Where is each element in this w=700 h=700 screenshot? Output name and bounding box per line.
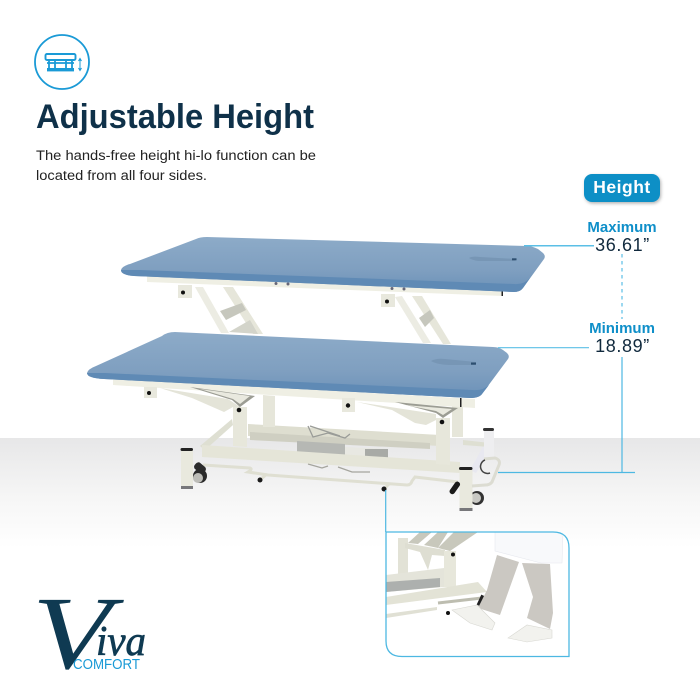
- table: lower top rail: [113, 378, 475, 425]
- lower table top cushion: [87, 332, 509, 398]
- right foot column: [459, 467, 472, 511]
- description text: [36, 148, 316, 184]
- height badge: Height: [593, 177, 651, 197]
- connector to inset: [385, 490, 387, 532]
- inset left leg: [478, 555, 519, 615]
- floor leader line: [498, 472, 635, 474]
- inset right leg: [522, 563, 553, 629]
- floor background: [0, 438, 700, 548]
- pedal rail: [203, 465, 458, 488]
- front beam: [202, 445, 460, 473]
- inset post: [398, 538, 408, 574]
- upper table top cushion: [121, 237, 545, 292]
- logo script iva: iva: [96, 619, 146, 665]
- table: scissor arms: [195, 287, 451, 344]
- inset table slats: [408, 532, 432, 544]
- logo script V: V: [32, 576, 125, 691]
- back wheels: [193, 469, 207, 483]
- solid height span: [621, 357, 623, 472]
- inset left shoe: [452, 605, 495, 630]
- description text: The hands-free height hi-lo function can be: [36, 148, 316, 164]
- icon: table with height arrow: [35, 35, 89, 89]
- table: base frame: [180, 395, 500, 511]
- inset rail: [386, 607, 437, 618]
- maximum leader line: [524, 245, 594, 247]
- bracket middle: [342, 398, 355, 412]
- maximum value: 36.61”: [595, 235, 650, 255]
- minimum leader line: [498, 347, 589, 349]
- left foot column: [180, 448, 193, 489]
- inset photo: foot pedal: [386, 532, 569, 657]
- bracket left: [144, 387, 157, 398]
- logo: [32, 576, 146, 691]
- logo subtitle: COMFORT: [73, 657, 140, 673]
- inset coat: [495, 532, 563, 563]
- bracket left: [178, 285, 192, 298]
- inset arm: [405, 543, 445, 570]
- bracket right: [381, 294, 395, 307]
- inset pedal: [438, 598, 482, 603]
- title: Adjustable Height: [36, 98, 314, 136]
- uprights: [233, 407, 247, 447]
- pedal knobs: [258, 478, 262, 482]
- inset right shoe: [508, 625, 552, 642]
- minimum label: Minimum: [589, 320, 655, 337]
- back right column: [472, 428, 500, 486]
- left arm: [160, 388, 240, 412]
- minimum value: 18.89”: [595, 336, 650, 356]
- back frame: [248, 424, 440, 446]
- right arm: [357, 402, 436, 425]
- description text: located from all four sides.: [36, 168, 207, 184]
- table: upper top rail: [147, 276, 503, 307]
- inset beam: [386, 582, 487, 605]
- height badge: [584, 174, 660, 202]
- inset frame: [386, 532, 569, 656]
- inset upright: [444, 551, 456, 587]
- inset mechanism: [386, 568, 444, 592]
- dashed height span: [621, 254, 623, 319]
- maximum label: Maximum: [587, 219, 657, 236]
- motor and cables: [297, 441, 345, 456]
